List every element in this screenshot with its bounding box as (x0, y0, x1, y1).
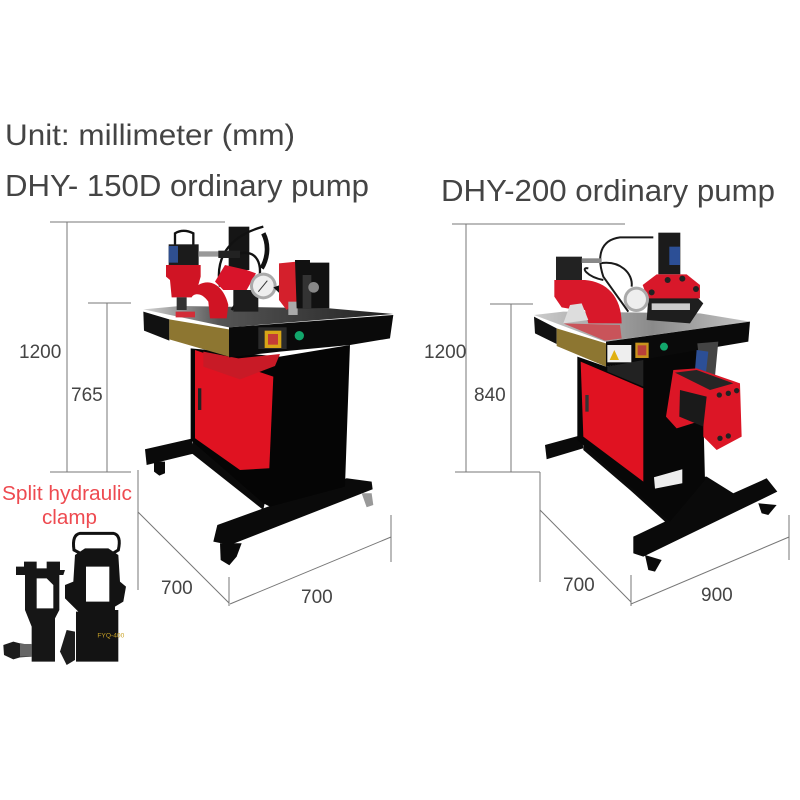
warning label (607, 345, 631, 362)
gold plate (169, 319, 229, 357)
red reflection (563, 323, 622, 341)
label: width 900: 900 (701, 585, 733, 606)
pressure gauge (624, 287, 649, 312)
cabinet latch (198, 388, 201, 410)
red cabinet (581, 362, 643, 482)
large clamp handle (73, 533, 119, 555)
label: depth 700: 700 (563, 575, 595, 596)
label: height 1200: 1200 (19, 342, 61, 363)
caster wheel (362, 493, 373, 507)
right black frame (295, 260, 329, 308)
large clamp fitting (60, 630, 75, 665)
clamp tools (3, 533, 126, 665)
table top (143, 306, 393, 327)
callout: split hydraulic clamp: clamp (42, 507, 97, 529)
table front face (606, 322, 750, 367)
left cylinder (556, 257, 582, 281)
heading: DHY-200 model: DHY-200 ordinary pump (441, 173, 775, 208)
warning sticker (654, 469, 682, 489)
cabinet latch (585, 395, 589, 412)
gauge fitting (273, 282, 300, 300)
label: depth 700: 700 (161, 578, 193, 599)
punch cylinder (175, 231, 193, 245)
callout: split hydraulic clamp (2, 483, 132, 529)
punch red body (166, 265, 228, 318)
tall cylinder (658, 233, 680, 274)
label: height 765: 765 (71, 385, 103, 406)
hoses (219, 227, 267, 310)
center red press (215, 265, 256, 290)
base feet (145, 439, 373, 565)
table left face (534, 317, 557, 344)
side cylinder (697, 342, 718, 383)
label: height 1200: 1200 (424, 342, 466, 363)
rear leg and pillar (191, 345, 350, 507)
punch red body (554, 280, 622, 323)
machine: DHY-150D (143, 227, 393, 565)
machine: DHY-200 (534, 233, 777, 572)
right red unit (279, 262, 297, 310)
gold plate (557, 328, 606, 367)
rear leg and pillar (577, 347, 705, 522)
table top (534, 312, 750, 342)
hoses (585, 237, 653, 312)
green button (295, 331, 304, 340)
pressure gauge (250, 273, 277, 299)
connector (198, 251, 220, 257)
cabinet drawer (203, 352, 280, 379)
heading: DHY-150D model: DHY- 150D ordinary pump (5, 168, 369, 203)
cabinet interior (607, 360, 643, 387)
callout: split hydraulic clamp: Split hydraulic (2, 483, 132, 505)
dimension lines: DHY-200 (452, 224, 789, 606)
base feet (545, 435, 777, 572)
unit heading: Unit: millimeter (mm) (5, 119, 295, 152)
small clamp (16, 562, 65, 662)
shear head red (643, 274, 700, 300)
shear base (647, 298, 703, 323)
label: width 700: 700 (301, 587, 333, 608)
punch die (563, 303, 588, 323)
rear cylinder (229, 227, 249, 270)
label: height 840: 840 (474, 385, 506, 406)
large clamp body (65, 548, 126, 662)
red cabinet (195, 350, 273, 470)
connector (582, 258, 602, 263)
switch box (635, 343, 649, 358)
side bender (666, 368, 742, 450)
green button (660, 343, 668, 351)
small clamp hose fitting (3, 642, 32, 659)
switch box (258, 327, 287, 349)
large clamp label: FYQ-400 (97, 633, 125, 640)
table front face (229, 315, 393, 357)
table left face (143, 312, 169, 341)
dimension lines: DHY-150D (50, 222, 391, 606)
